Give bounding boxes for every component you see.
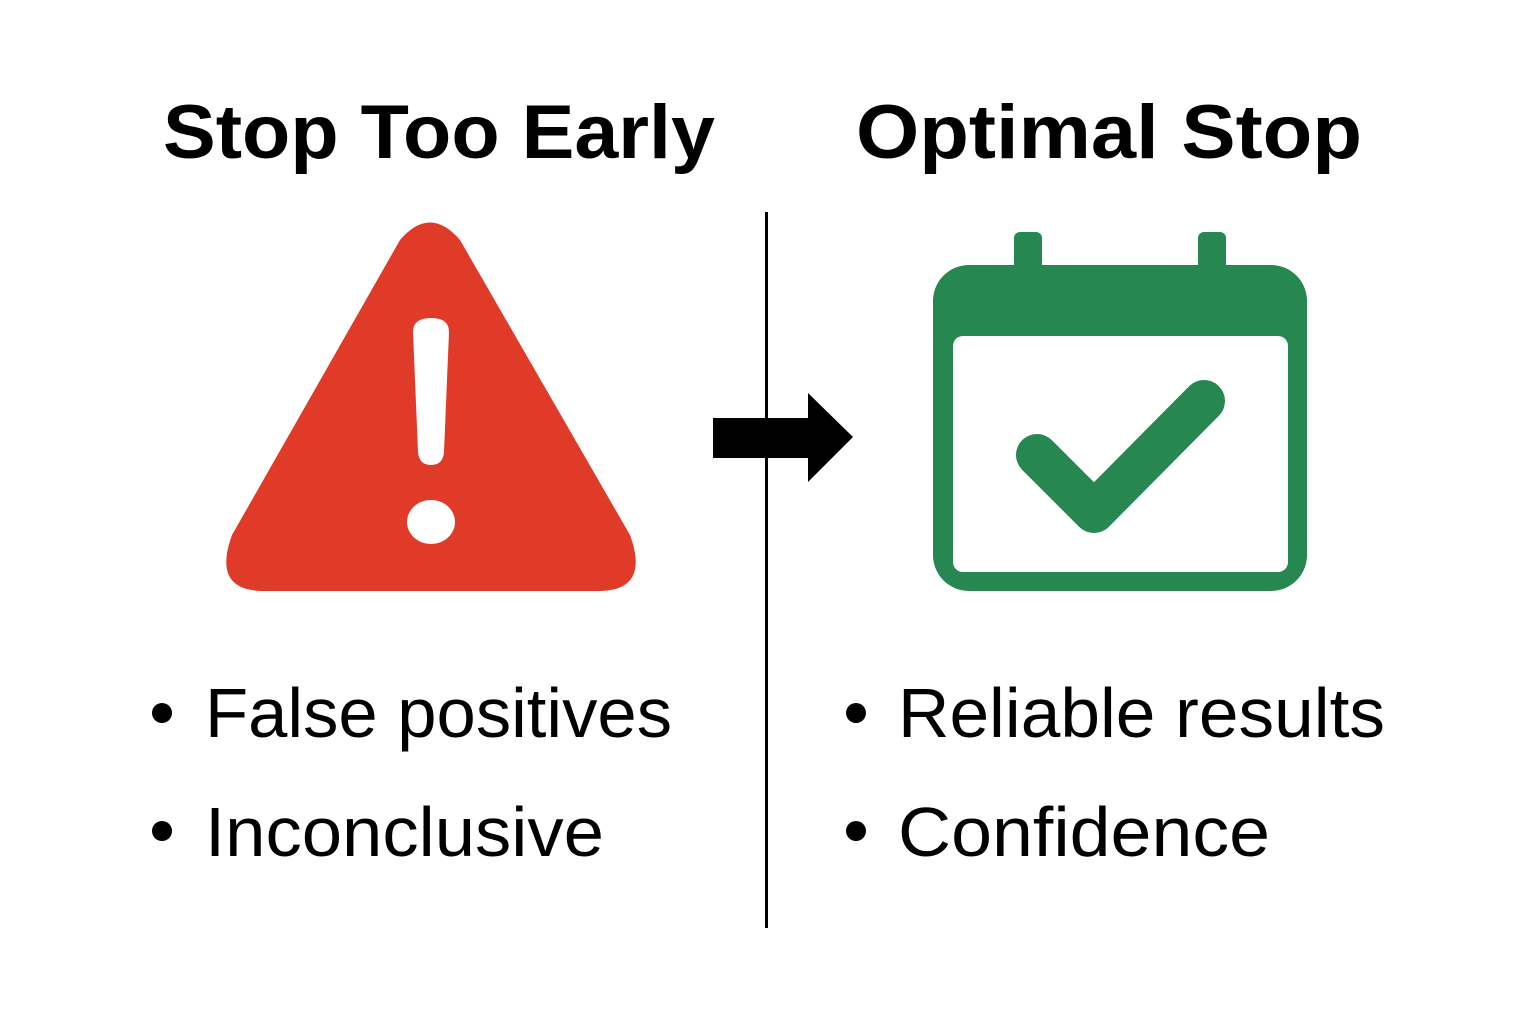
icon: calendar with checkmark <box>933 232 1307 591</box>
list: optimal stop outcomes: Confidence <box>898 793 1270 871</box>
title: Optimal Stop: Optimal Stop <box>856 90 1362 175</box>
divider line <box>765 212 768 928</box>
list: stop too early outcomes: False positives <box>205 674 672 752</box>
icon: warning triangle <box>226 222 636 591</box>
arrow <box>713 393 853 482</box>
list: optimal stop outcomes <box>846 674 1385 871</box>
list: optimal stop outcomes: Reliable results <box>898 674 1385 752</box>
list: stop too early outcomes: Inconclusive <box>205 793 604 871</box>
list: stop too early outcomes <box>152 674 672 871</box>
title: Stop Too Early: Stop Too Early <box>163 90 715 175</box>
